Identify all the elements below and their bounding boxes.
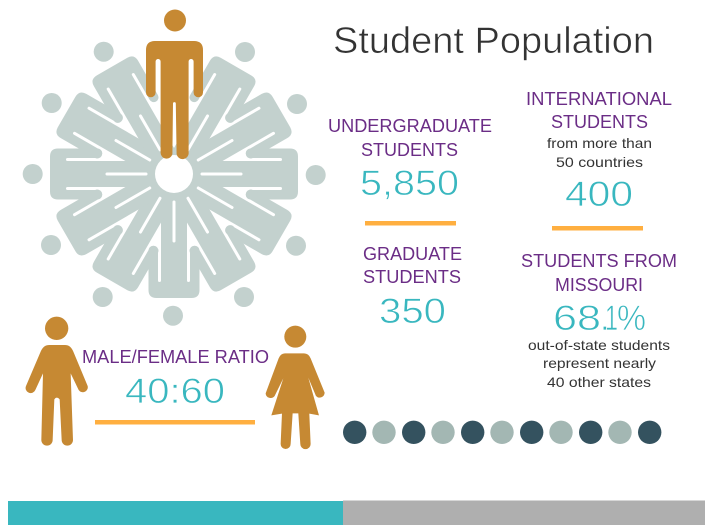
stat: students from Missouri: . [600, 299, 610, 338]
bottom progress bar [8, 500, 705, 525]
stat: graduate students: 350 [379, 292, 446, 331]
stat: students from Missouri: STUDENTS FROM [521, 251, 677, 271]
stat: students from Missouri: represent nearly [543, 355, 656, 371]
stat: undergraduate students: UNDERGRADUATE [328, 116, 492, 136]
title: Student Population [333, 20, 654, 61]
stat: students from Missouri: out-of-state students [528, 337, 670, 353]
stat: students from Missouri: 1 [605, 299, 618, 338]
stat: students from Missouri: % [617, 299, 646, 338]
stat: students from Missouri: 68 [553, 299, 601, 338]
orange figure [146, 10, 203, 159]
stat: international students: from more than [547, 135, 652, 151]
stat: male/female ratio [82, 347, 269, 424]
stat: international students: 400 [565, 175, 633, 214]
stat: international students: STUDENTS [551, 112, 648, 132]
ring of dots [23, 42, 326, 326]
icon: female figure [266, 326, 325, 449]
stat: international students [526, 89, 672, 230]
stat: male/female ratio: MALE/FEMALE RATIO [82, 347, 269, 367]
stat: international students: INTERNATIONAL [526, 89, 672, 109]
wheel of students [23, 10, 326, 326]
stat: undergraduate students: 5,850 [360, 164, 459, 203]
stat: undergraduate students [328, 116, 492, 226]
grey figures [50, 54, 298, 298]
stat: male/female ratio: 40:60 [125, 372, 225, 411]
stat: international students: 50 countries [556, 154, 643, 170]
stat: undergraduate students: STUDENTS [361, 140, 458, 160]
stat: students from Missouri: 40 other states [547, 374, 651, 390]
stat: graduate students: GRADUATE [363, 244, 462, 264]
stat: students from Missouri: MISSOURI [555, 275, 643, 295]
row of dots [343, 421, 661, 444]
stat: students from Missouri [521, 251, 677, 390]
icon: male figure [26, 317, 88, 446]
stat: graduate students: STUDENTS [363, 267, 461, 287]
stat: graduate students [363, 244, 462, 331]
